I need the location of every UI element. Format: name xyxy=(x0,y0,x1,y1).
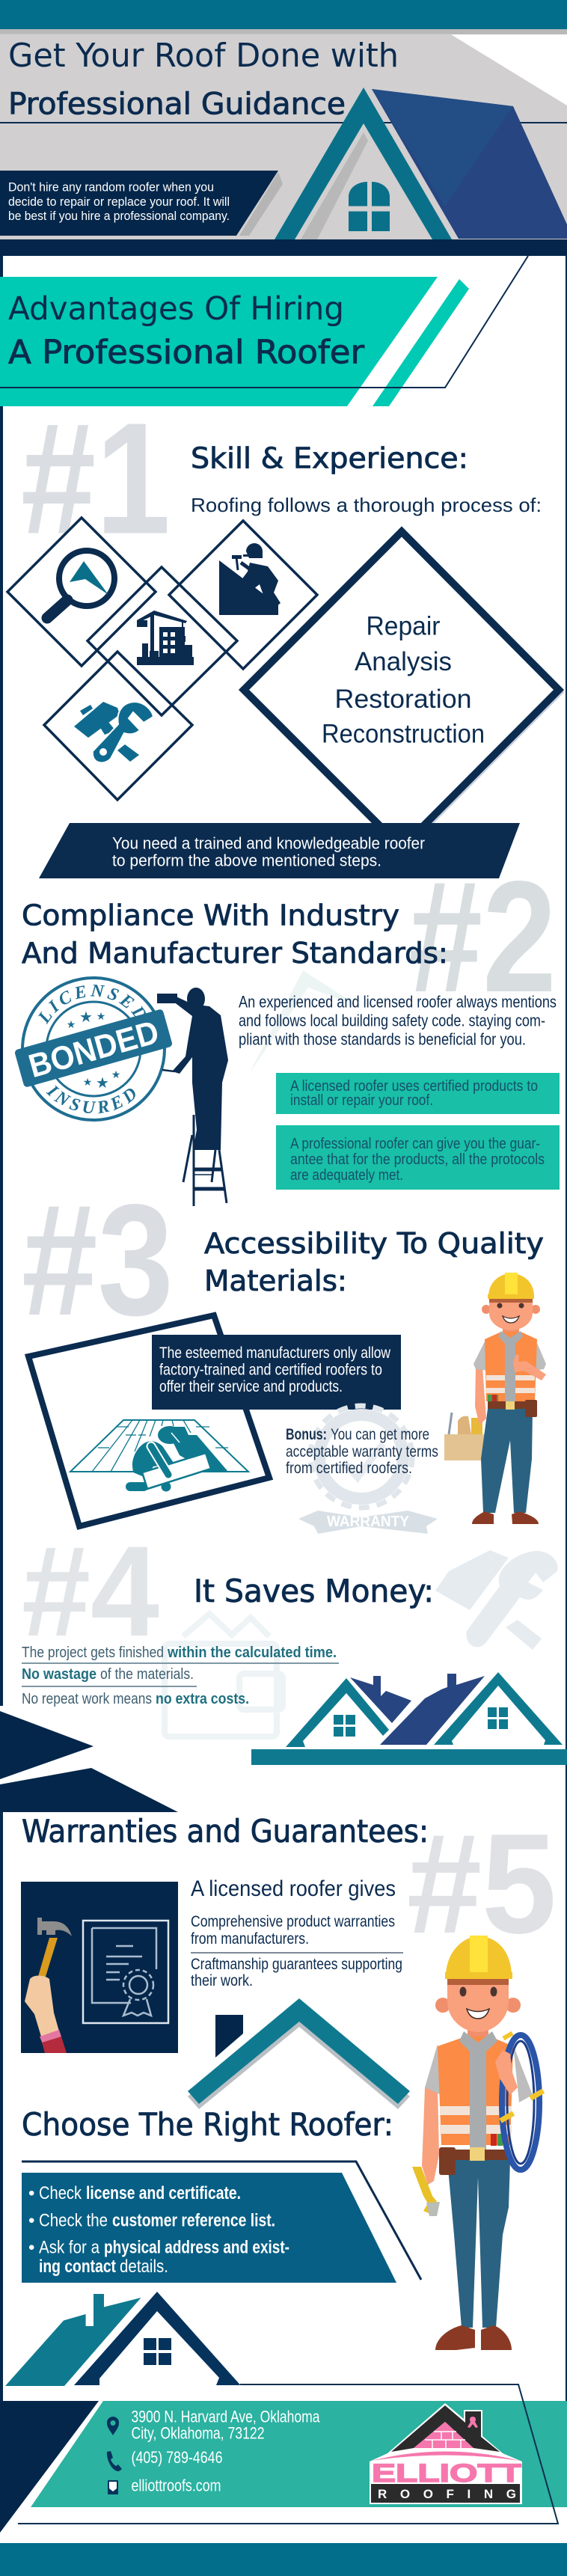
icon: bonded stamp: ★ xyxy=(67,1018,76,1030)
logo: elliott roofing: ROOFING xyxy=(378,2487,516,2501)
big diamond: process steps xyxy=(244,531,562,850)
text: savings list: No wastage xyxy=(22,1666,96,1683)
panel: hero header xyxy=(0,0,567,239)
text: licensed roofer gives: from manufacturers. xyxy=(191,1930,309,1948)
callout: intro banner: be best if you hire a professional company. xyxy=(8,209,230,223)
section: choose the right roofer xyxy=(5,1936,545,2386)
panel: checklist: ing contact xyxy=(39,2257,116,2277)
heading: get your roof done: Get Your Roof Done with xyxy=(8,37,399,75)
icon: worker with cable xyxy=(412,1936,545,2350)
callout: trained roofer: You need a trained and knowledgeable roofer xyxy=(112,833,425,853)
icon: phone xyxy=(107,2451,122,2471)
navy arrow shapes xyxy=(0,1706,178,1812)
heading: choose: Choose The Right Roofer: xyxy=(22,2106,393,2143)
text: contact details: 3900 N. Harvard Ave, Oklahoma xyxy=(132,2408,320,2426)
panel: checklist: Check the xyxy=(39,2210,108,2231)
panel: checklist: Check xyxy=(39,2183,82,2203)
icon: house xyxy=(275,88,567,239)
panel: checklist: details. xyxy=(120,2257,168,2277)
callout: intro banner xyxy=(0,171,283,236)
big diamond: process steps: Repair xyxy=(367,612,441,640)
big diamond: process steps: Restoration xyxy=(335,685,471,714)
heading: compliance xyxy=(22,899,448,970)
watermark: wallet xyxy=(165,1614,283,1737)
heading: advantages xyxy=(8,290,365,371)
watermark: warranty badge xyxy=(298,1406,438,1534)
panel: main title banner xyxy=(0,256,528,406)
icon: bonded stamp: ★ xyxy=(83,1076,92,1088)
panel: checklist: • xyxy=(28,2210,34,2231)
icon: bonded stamp: ★ xyxy=(96,1075,109,1092)
logo: elliott roofing: ELLIOTT xyxy=(372,2459,521,2488)
callout: guarantee: are adequately met. xyxy=(290,1167,403,1184)
callout: certified products xyxy=(276,1073,560,1114)
icon: hammer and wrench xyxy=(74,702,153,762)
icon: bonded stamp: BONDED xyxy=(25,1014,163,1085)
callout: trained roofer xyxy=(39,823,520,878)
callout: intro banner: Don't hire any random roofer when you xyxy=(8,180,214,195)
text: bonus: Bonus: xyxy=(286,1426,327,1443)
text: licensed roofer gives: Comprehensive product warranties xyxy=(191,1913,395,1930)
section 4: saves money xyxy=(0,1520,567,1812)
icon: worker silhouette on ladder xyxy=(157,988,228,1206)
heading: advantages: Advantages Of Hiring xyxy=(8,290,344,328)
text: savings list xyxy=(22,1645,339,1707)
icon: certificate and hammer panel xyxy=(21,1882,178,2053)
icon: bonded stamp: ★ xyxy=(111,1068,120,1080)
icon: bonded stamp: ★ xyxy=(79,1009,93,1026)
text: contact details xyxy=(132,2408,320,2494)
section 1: skill and experience xyxy=(7,389,562,878)
text: licensed roofer gives: A licensed roofer gives xyxy=(191,1876,396,1901)
icon: houses row xyxy=(251,1672,567,1765)
heading: get your roof done: Professional Guidance xyxy=(8,87,346,121)
heading: compliance: And Manufacturer Standards: xyxy=(22,937,448,970)
section 5: warranties xyxy=(21,1805,557,2109)
text: savings list: of the materials. xyxy=(100,1666,194,1683)
panel: checklist: license and certificate. xyxy=(86,2183,241,2203)
big diamond: process steps: Reconstruction xyxy=(322,720,485,748)
bottom bar xyxy=(0,2543,567,2576)
icon: bonded stamp: ★ xyxy=(96,1010,105,1022)
panel: checklist xyxy=(22,2173,396,2283)
heading: compliance: Compliance With Industry xyxy=(22,899,399,932)
heading: saves money: It Saves Money: xyxy=(194,1573,434,1609)
text: contact details: elliottroofs.com xyxy=(132,2476,221,2494)
icon: bonded stamp: INSURED xyxy=(46,1085,135,1113)
callout: manufacturers: The esteemed manufacturers only allow xyxy=(159,1344,391,1362)
number 4: #4 xyxy=(22,1520,159,1663)
heading: advantages: A Professional Roofer xyxy=(8,334,365,371)
panel: footer contact xyxy=(0,2384,567,2533)
watermark: tools xyxy=(435,1550,558,1650)
section 2: compliance xyxy=(15,848,560,1206)
icon: magnifier xyxy=(47,551,114,618)
heading: accessibility: Accessibility To Quality xyxy=(204,1227,544,1260)
text: licensed roofer gives xyxy=(191,1876,403,1989)
text: bonus xyxy=(286,1426,438,1477)
icon: bonded stamp xyxy=(15,976,172,1122)
heading: skill: Skill & Experience: xyxy=(191,441,468,474)
number 3: #3 xyxy=(22,1171,174,1348)
section 3: quality materials xyxy=(22,1171,546,1534)
callout: trained roofer: to perform the above mentioned steps. xyxy=(112,851,381,869)
number 5: #5 xyxy=(407,1805,557,1963)
text: savings list: no extra costs. xyxy=(156,1691,249,1707)
panel: checklist: • xyxy=(28,2237,34,2258)
outline accent xyxy=(22,2162,421,2280)
icon: location pin xyxy=(107,2417,119,2435)
tilted frame xyxy=(28,1315,269,1526)
callout: guarantee xyxy=(276,1125,560,1190)
watermark: warranty badge: WARRANTY xyxy=(327,1514,410,1530)
watermark chevron xyxy=(249,970,359,1074)
number 1: #1 xyxy=(21,389,171,567)
text: savings list: within the calculated time. xyxy=(167,1645,337,1661)
callout: manufacturers xyxy=(152,1335,401,1410)
text: savings list: The project gets finished xyxy=(22,1645,164,1661)
icon: bonded stamp: LICENSED xyxy=(38,985,146,1025)
logo: elliott roofing xyxy=(370,2403,522,2504)
heading: accessibility: Materials: xyxy=(204,1264,347,1297)
heading: warranties: Warranties and Guarantees: xyxy=(22,1813,429,1850)
heading: accessibility xyxy=(204,1227,544,1297)
text: licensed roofer gives: their work. xyxy=(191,1972,253,1989)
text: savings list: No repeat work means xyxy=(22,1691,152,1707)
text: licensed roofer gives: Craftmanship guarantees supporting xyxy=(191,1956,402,1973)
panel: checklist: customer reference list. xyxy=(112,2210,275,2231)
callout: certified products: install or repair your roof. xyxy=(290,1092,433,1109)
panel: checklist: • xyxy=(28,2183,34,2203)
icon: bottom-left house xyxy=(5,2292,241,2386)
big diamond: process steps: Analysis xyxy=(355,647,452,676)
panel: checklist: Ask for a xyxy=(39,2237,100,2258)
text: bonus: You can get more xyxy=(331,1426,429,1443)
heading: get your roof done xyxy=(8,37,399,121)
callout: manufacturers: factory-trained and certified roofers to xyxy=(159,1362,382,1378)
text: contact details: (405) 789-4646 xyxy=(132,2448,223,2467)
text: contact details: City, Oklahoma, 73122 xyxy=(132,2424,265,2442)
text: bonus: acceptable warranty terms xyxy=(286,1443,438,1460)
text: bonus: from certified roofers. xyxy=(286,1460,412,1477)
callout: manufacturers: offer their service and products. xyxy=(159,1378,343,1395)
callout: certified products: A licensed roofer uses certified products to xyxy=(290,1078,538,1095)
icon: worker with toolbox xyxy=(444,1273,546,1524)
navy divider bar xyxy=(0,239,567,256)
text: compliance paragraph xyxy=(239,992,557,1049)
small diamonds with icons xyxy=(7,518,317,800)
icon: mail xyxy=(108,2480,118,2494)
subheading: process: Roofing follows a thorough process of: xyxy=(191,494,542,516)
icon: crane building xyxy=(137,611,194,665)
panel: checklist: physical address and exist- xyxy=(104,2237,289,2258)
icon: roof chevron xyxy=(188,1998,410,2109)
icon: tile layer xyxy=(70,1420,248,1492)
icon: roofer on slope xyxy=(219,543,281,615)
callout: intro banner: decide to repair or replace your roof. It will xyxy=(8,195,230,209)
